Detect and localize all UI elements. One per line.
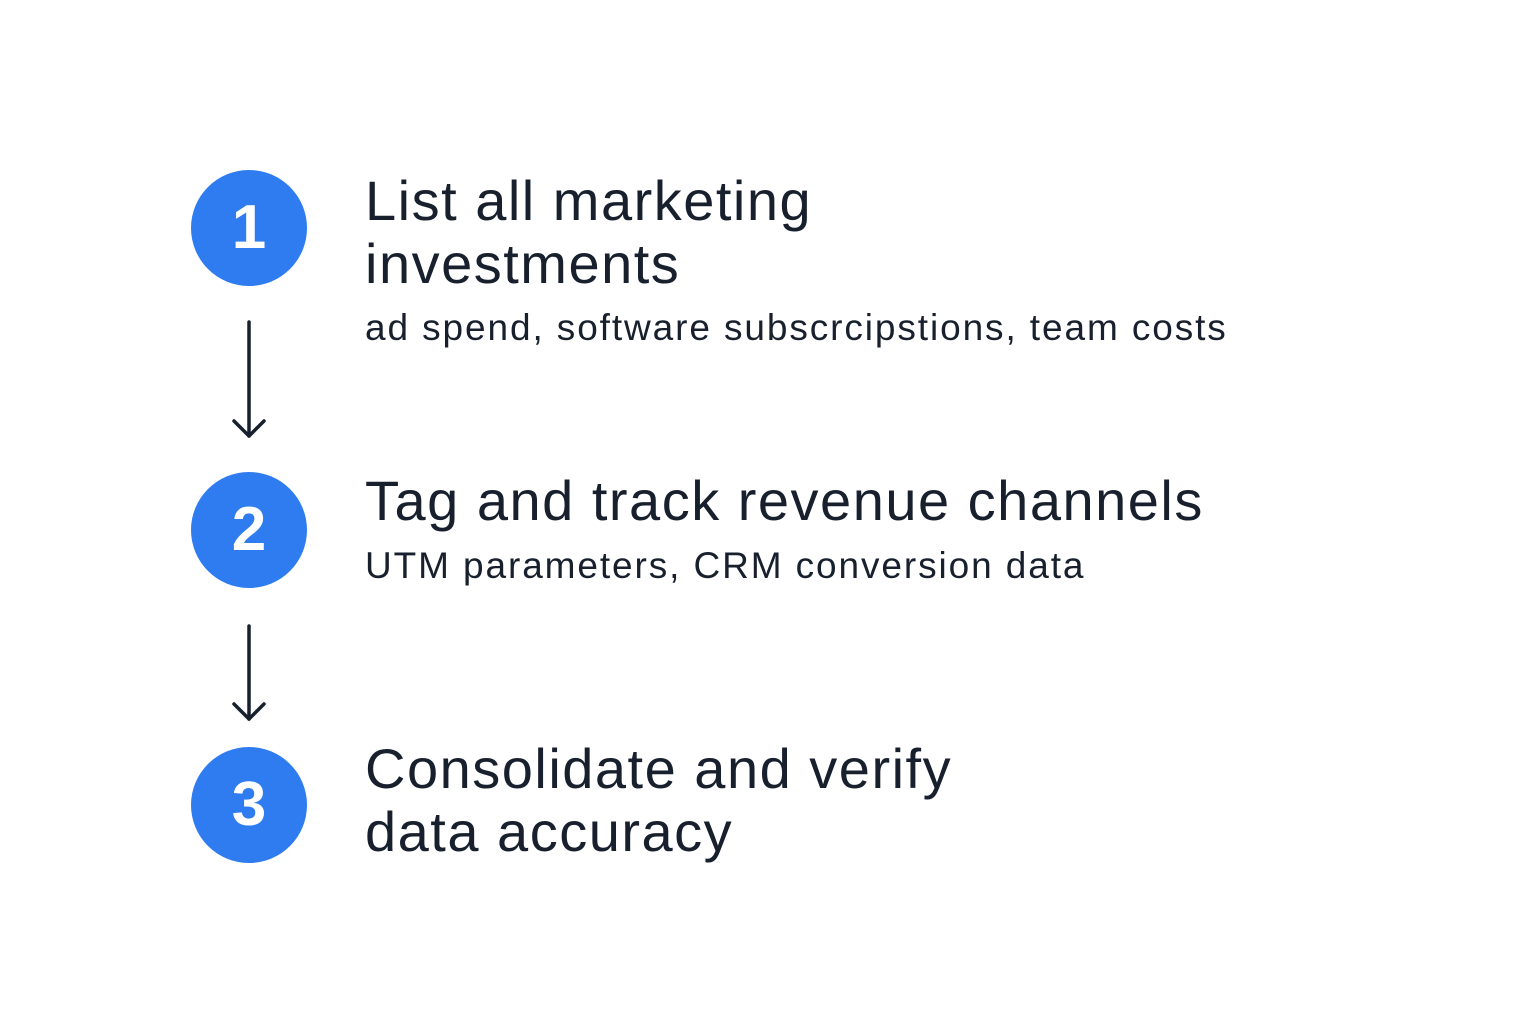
arrow 2 bbox=[232, 624, 266, 721]
step 3 circle: 3 bbox=[232, 770, 266, 839]
step 2 circle bbox=[191, 472, 307, 588]
step 1 circle: 1 bbox=[232, 193, 266, 262]
step 1 heading bbox=[365, 169, 812, 295]
step 3 circle bbox=[191, 747, 307, 863]
step 2 subtitle: UTM parameters, CRM conversion data bbox=[365, 545, 1085, 586]
step 3 heading: Consolidate and verify bbox=[365, 737, 952, 800]
arrow 1 bbox=[232, 320, 266, 438]
step 2 circle: 2 bbox=[232, 495, 266, 564]
step 1 heading: investments bbox=[365, 232, 680, 295]
step 3 heading: data accuracy bbox=[365, 800, 733, 863]
step 1 heading: List all marketing bbox=[365, 169, 812, 232]
step 1 circle bbox=[191, 170, 307, 286]
step 1 subtitle: ad spend, software subscrcipstions, team costs bbox=[365, 307, 1228, 348]
step 2 heading: Tag and track revenue channels bbox=[365, 469, 1204, 532]
step 3 heading bbox=[365, 737, 952, 863]
